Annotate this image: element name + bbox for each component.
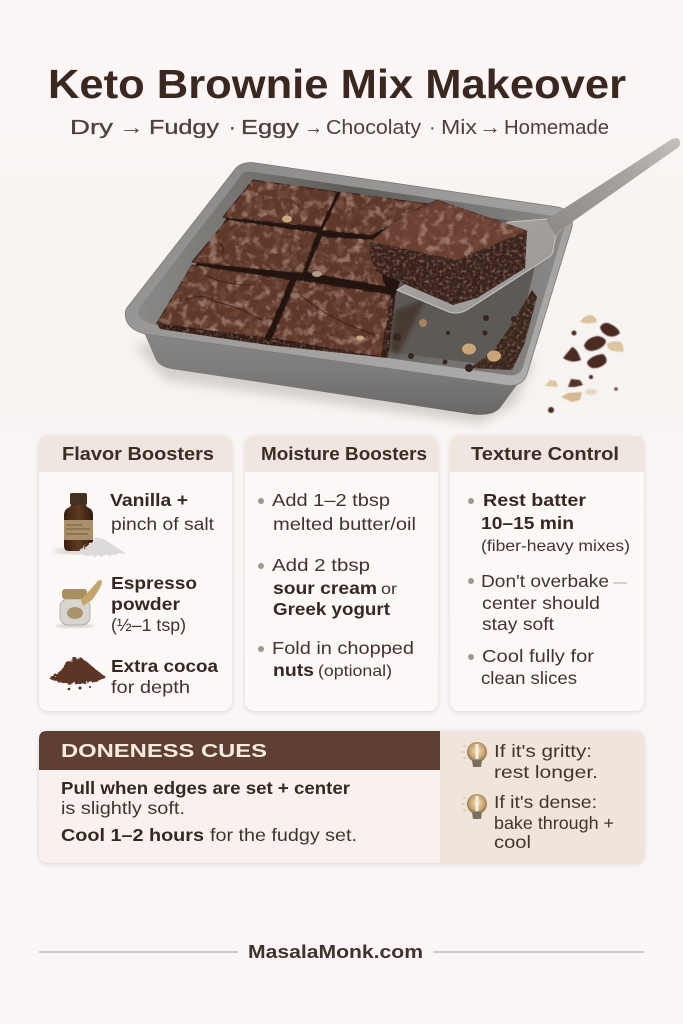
tip: rest batter: (fiber-heavy mixes) [481, 538, 630, 555]
tip: cool fully: Cool fully for [482, 646, 594, 666]
panel: flavor boosters: pinch of salt [111, 514, 214, 534]
subtitle: Homemade [504, 117, 609, 139]
tip: don't overbake: stay soft [482, 614, 554, 634]
subtitle: → [304, 117, 323, 139]
tip: don't overbake [468, 571, 627, 634]
panel: doneness cues: rest longer. [494, 762, 598, 782]
subtitle: Mix [441, 117, 477, 139]
panel: flavor boosters: (½–1 tsp) [111, 615, 186, 635]
panel: moisture boosters [245, 436, 438, 711]
panel: doneness cues: is slightly soft. [61, 798, 185, 818]
brownie squares [157, 180, 428, 357]
tip: sour cream: sour cream [273, 578, 377, 598]
tip: melted butter [258, 490, 416, 534]
heading: texture control: Texture Control [471, 443, 619, 464]
tip: nuts: (optional) [318, 663, 392, 680]
tip: sour cream [258, 555, 398, 619]
tip: sour cream: Greek yogurt [273, 599, 390, 619]
tip: nuts [258, 638, 414, 680]
subtitle: Eggy [241, 117, 299, 139]
subtitle: Dry [70, 117, 113, 139]
tip: sour cream: or [381, 581, 398, 598]
card body [450, 436, 644, 711]
subtitle [70, 117, 609, 139]
pan floor [162, 182, 545, 368]
photo: brownie pan with spatula [125, 138, 680, 424]
panel: flavor boosters: for depth [111, 677, 190, 697]
pan interior [138, 172, 564, 375]
icon: vanilla bottle and salt [53, 493, 124, 556]
panel: flavor boosters [39, 436, 232, 711]
heading: flavor boosters: Flavor Boosters [62, 443, 214, 464]
tip: don't overbake: Don't overbake [481, 571, 609, 591]
panel: flavor boosters: powder [111, 594, 180, 614]
title: Keto Brownie Mix Makeover [48, 61, 626, 107]
tip: rest batter [468, 490, 630, 555]
header band [39, 731, 440, 770]
tip: cool fully: clean slices [481, 668, 577, 688]
text: vanilla: Vanilla + [110, 490, 188, 510]
card header [245, 436, 438, 472]
tips column background [440, 731, 644, 863]
subtitle: · [229, 117, 236, 139]
brownie cracks [185, 217, 375, 335]
tip: melted butter: Add 1–2 tbsp [272, 490, 390, 510]
tip: don't overbake: center should [482, 593, 600, 613]
card body [39, 436, 232, 711]
pan shadow [135, 330, 535, 424]
footer: MasalaMonk.com [248, 942, 423, 962]
panel: doneness cues [39, 731, 644, 863]
text: gritty tip: If it's gritty: [494, 741, 592, 761]
subtitle: Fudgy [149, 117, 219, 139]
icon: espresso jar [55, 580, 102, 628]
spatula handle [546, 138, 680, 236]
panel: doneness cues: cool [494, 832, 531, 852]
text: pull cue: Pull when edges are set + center [61, 778, 350, 798]
dark gaps under brownies [156, 180, 428, 356]
subtitle: → [119, 117, 144, 139]
scattered chocolate and nuts [545, 315, 624, 413]
heading: doneness cues: DONENESS CUES [61, 741, 267, 761]
nut bits on brownies [282, 216, 364, 340]
text: espresso: Espresso [111, 573, 197, 593]
pan rim [125, 163, 572, 386]
lifted brownie [370, 200, 527, 305]
spatula blade [397, 219, 562, 313]
panel: texture control [450, 436, 644, 711]
tip: nuts: nuts [273, 660, 314, 680]
text: dense tip: If it's dense: [494, 792, 597, 812]
icon: lightbulb gritty [461, 742, 487, 767]
icon: lightbulb dense [461, 794, 487, 819]
subtitle: Chocolaty [326, 117, 421, 139]
tip: don't overbake: — [613, 574, 627, 591]
tip: rest batter: Rest batter [483, 490, 586, 510]
panel: doneness cues: for the fudgy set. [210, 825, 357, 845]
nut pieces in pan [419, 319, 501, 362]
panel: doneness cues: bake through + [494, 813, 614, 833]
crumbs in pan [390, 290, 537, 372]
tip: melted butter: melted butter/oil [273, 514, 416, 534]
pan side wall [143, 320, 522, 415]
card header [39, 436, 232, 472]
tip: sour cream: Add 2 tbsp [272, 555, 370, 575]
tip: nuts: Fold in chopped [272, 638, 414, 658]
panel background [39, 731, 644, 863]
card header [450, 436, 644, 472]
tip: rest batter: 10–15 min [481, 513, 574, 533]
tip: cool fully [468, 646, 594, 688]
brownie front edges [157, 297, 395, 358]
text: cocoa: Extra cocoa [111, 656, 218, 676]
icon: cocoa pile [50, 658, 106, 690]
text: cool cue: Cool 1–2 hours [61, 825, 204, 845]
subtitle: → [479, 117, 501, 139]
subtitle: · [429, 117, 436, 139]
card body [245, 436, 438, 711]
heading: moisture boosters: Moisture Boosters [261, 443, 427, 464]
